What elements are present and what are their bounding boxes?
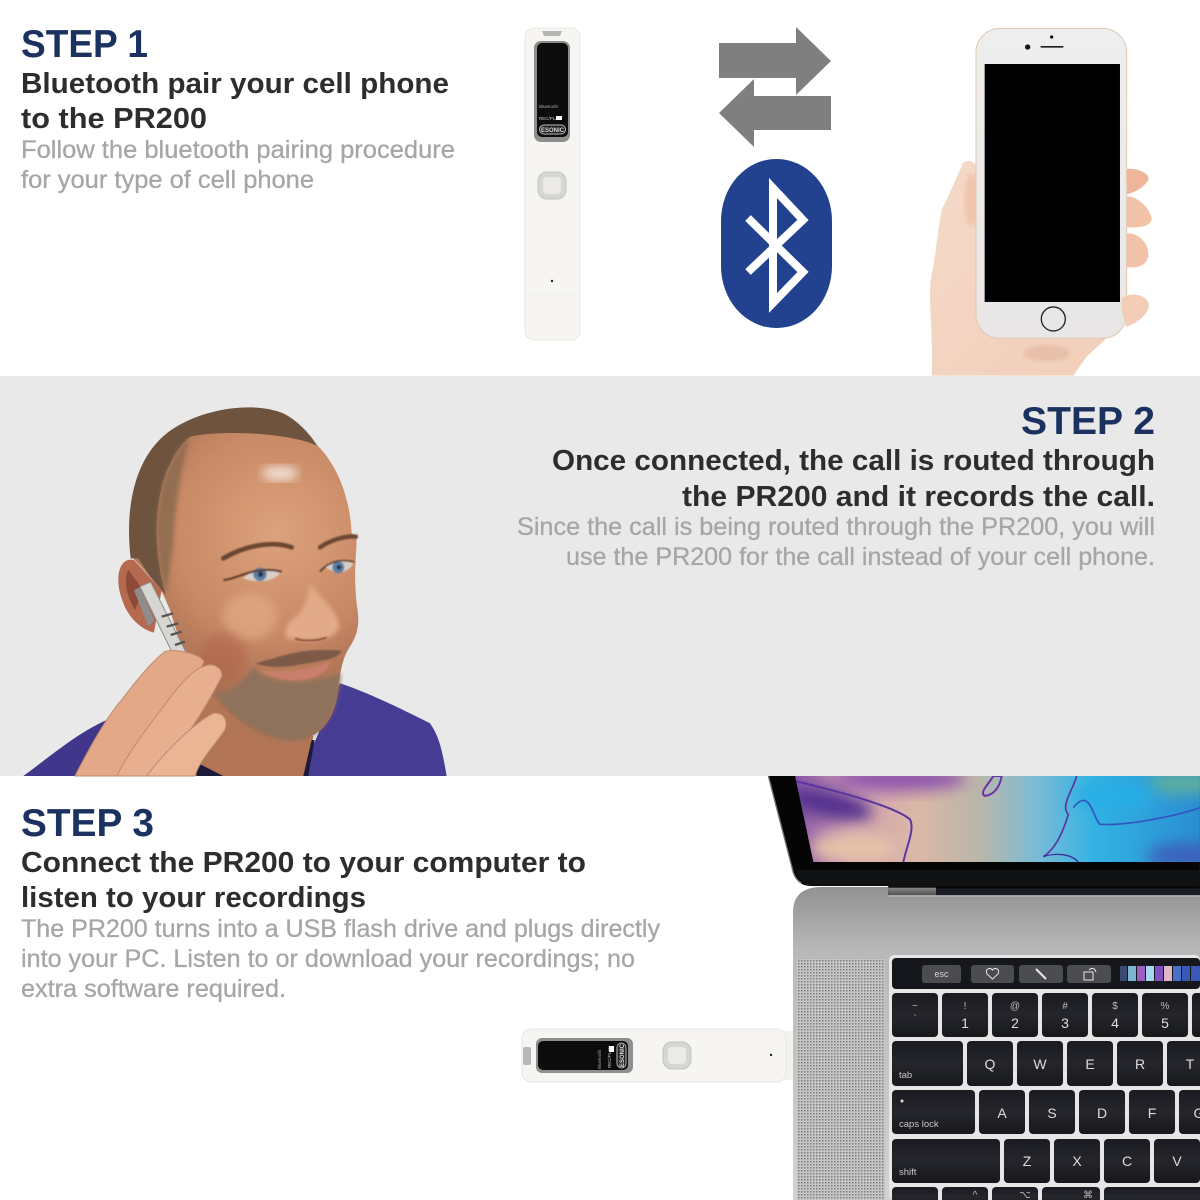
laptop base bbox=[793, 887, 1200, 1200]
keyboard keys: C bbox=[1122, 1153, 1132, 1169]
heading: step 3: STEP 3 bbox=[21, 802, 154, 845]
subheading: step 3: Connect the PR200 to your computer to bbox=[21, 847, 586, 879]
icon: PR200 recorder vertical: ESONIC bbox=[541, 128, 565, 134]
text block: step 3 description: extra software required. bbox=[21, 975, 286, 1003]
keyboard keys: X bbox=[1072, 1153, 1082, 1169]
touch bar bbox=[892, 958, 1200, 989]
illustration: laptop bbox=[768, 766, 1200, 1200]
keyboard keys: 3 bbox=[1061, 1015, 1069, 1031]
panel: step 2 band bbox=[0, 376, 1200, 776]
arrow: transfer arrows bbox=[719, 27, 831, 147]
panel: step 1 bbox=[21, 23, 1152, 376]
keyboard keys: shift bbox=[899, 1167, 917, 1178]
keyboard keys: Z bbox=[1023, 1153, 1032, 1169]
heading: step 1: STEP 1 bbox=[21, 23, 148, 66]
keyboard keys: V bbox=[1172, 1153, 1182, 1169]
text block: step 3 description: The PR200 turns into a USB flash drive and plugs directly bbox=[21, 915, 660, 943]
keyboard keys: ~ bbox=[912, 1001, 918, 1012]
keyboard keys: 1 bbox=[961, 1015, 969, 1031]
icon: PR200 recorder plugged into laptop: REC/PLAY bbox=[607, 1046, 612, 1068]
subheading: step 2: the PR200 and it records the call. bbox=[682, 481, 1155, 513]
keyboard keys: tab bbox=[899, 1070, 912, 1081]
icon: PR200 recorder vertical: REC/PLAY bbox=[539, 116, 561, 121]
heading: step 2: STEP 2 bbox=[1021, 400, 1155, 443]
keyboard keys: Q bbox=[985, 1056, 996, 1072]
icon: bluetooth badge bbox=[721, 159, 832, 328]
icon: PR200 recorder plugged into laptop bbox=[522, 1029, 793, 1082]
text block: step 3 description: into your PC. Listen to or download your recordings; no bbox=[21, 945, 635, 973]
touch bar: esc bbox=[934, 969, 949, 979]
keyboard keys: 4 bbox=[1111, 1015, 1119, 1031]
icon: hand holding phone bbox=[930, 28, 1152, 376]
keyboard keys: # bbox=[1062, 1001, 1068, 1012]
keyboard keys: caps lock bbox=[899, 1119, 939, 1130]
subheading: step 3: listen to your recordings bbox=[21, 882, 366, 914]
keyboard keys: T bbox=[1186, 1056, 1195, 1072]
icon: PR200 recorder plugged into laptop: ESONIC bbox=[620, 1043, 626, 1067]
subheading: step 2: Once connected, the call is routed through bbox=[552, 445, 1155, 477]
illustration: man holding recorder to ear bbox=[23, 407, 447, 776]
laptop screen lid bbox=[768, 766, 1200, 896]
icon: PR200 recorder vertical: Bluetooth bbox=[539, 104, 559, 109]
subheading: step 1: to the PR200 bbox=[21, 103, 207, 135]
keyboard keys: ` bbox=[913, 1013, 917, 1025]
text block: step 1 description: Follow the bluetooth pairing procedure bbox=[21, 136, 455, 164]
keyboard keys bbox=[892, 993, 1200, 1200]
keyboard keys: A bbox=[997, 1105, 1007, 1121]
keyboard keys: 2 bbox=[1011, 1015, 1019, 1031]
icon: PR200 recorder vertical bbox=[525, 28, 580, 340]
keyboard keys: ! bbox=[964, 1001, 966, 1012]
icon: PR200 recorder plugged into laptop: Bluetooth bbox=[597, 1049, 602, 1069]
keyboard keys: D bbox=[1097, 1105, 1107, 1121]
text block: step 2 description: use the PR200 for the call instead of your cell phone. bbox=[566, 543, 1155, 571]
speaker grill bbox=[797, 958, 885, 1200]
subheading: step 1: Bluetooth pair your cell phone bbox=[21, 68, 449, 100]
keyboard keys: R bbox=[1135, 1056, 1145, 1072]
keyboard keys: F bbox=[1148, 1105, 1156, 1121]
keyboard keys: S bbox=[1047, 1105, 1057, 1121]
text block: step 2 description: Since the call is being routed through the PR200, you will bbox=[517, 513, 1155, 541]
keyboard keys: W bbox=[1033, 1056, 1047, 1072]
panel: step 3 bbox=[21, 766, 1200, 1200]
keyboard keys: 5 bbox=[1161, 1015, 1169, 1031]
keyboard keys: % bbox=[1161, 1001, 1170, 1012]
keyboard keys: $ bbox=[1112, 1001, 1118, 1012]
keyboard keys: @ bbox=[1010, 1001, 1020, 1012]
keyboard keys: E bbox=[1085, 1056, 1095, 1072]
keyboard well bbox=[889, 955, 1200, 1200]
text block: step 1 description: for your type of cell phone bbox=[21, 166, 314, 194]
